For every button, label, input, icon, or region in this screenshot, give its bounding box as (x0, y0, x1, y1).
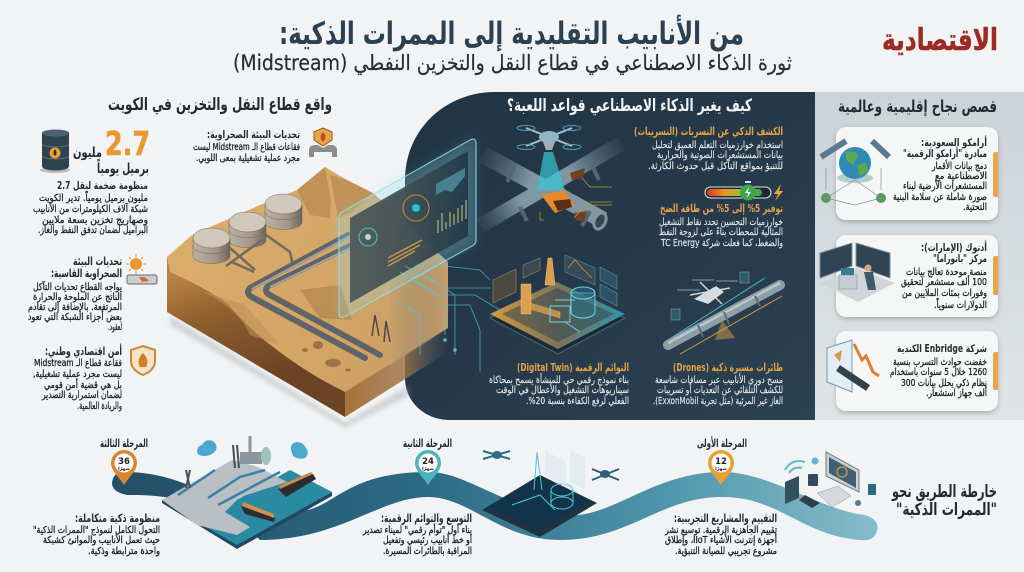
block: 5% pumping energy saving: توفير 5% إلى 5% من طاقة الضخ (660, 202, 783, 215)
scan beam (537, 152, 565, 190)
phase 3: منظومة ذكية متكاملة: (75, 511, 160, 526)
icon: energy meter (705, 181, 783, 201)
block: Kuwait network: البراميل لضمان تدفق النفط والغاز. (38, 225, 148, 236)
card: Enbridge: 1260 خلال 5 سنوات باستخدام (890, 367, 987, 378)
icon: sun and corroded pipe (126, 254, 157, 284)
pin: 12 months (708, 450, 734, 485)
block: harsh desert environment (28, 254, 157, 333)
card: Enbridge: ألف جهاز استشعار. (926, 386, 987, 399)
main pipelines (248, 235, 365, 358)
beam (715, 320, 735, 340)
card: Aramco (821, 127, 998, 220)
block: 5% pumping energy saving: والضغط، كما فعلت شركة TC Energy (660, 238, 783, 249)
card: Enbridge: نظام ذكي يحلل بيانات 300 (901, 378, 987, 389)
block: national economic security: بل هي قضية أمن قومي (44, 378, 122, 391)
block: national economic security: ليست مجرد عملية تشغيلية, (33, 369, 122, 380)
phase 2: المرحلة الثانية (403, 436, 452, 450)
ship lower (241, 502, 275, 522)
pin: 36 months (111, 450, 137, 485)
signs (671, 309, 680, 320)
phase 1 (664, 436, 777, 557)
block: smart leak detection: للتنبؤ بمواقع التآكل قبل حدوث الكارثة. (648, 159, 783, 172)
block: harsh desert environment: بعض أجزاء الشبكة التي تعود (28, 310, 122, 323)
icon: flame shield with pipe (309, 128, 337, 157)
pipelines on land (178, 470, 280, 505)
phase 3: حيث تعمل الأنابيب والموانئ كشبكة (43, 533, 160, 546)
pin: 36 months: 36 (118, 457, 130, 467)
card: ADNOC (820, 235, 998, 317)
block: desert challenges top: فقاعات قطاع الـ Midstream ليست (193, 142, 300, 153)
land (162, 460, 287, 535)
screen frame (339, 139, 476, 317)
refinery (186, 436, 271, 488)
pipe one (482, 154, 603, 220)
block: harsh desert environment: لعقود. (108, 322, 122, 333)
icon: drone right (592, 469, 619, 480)
ship upper (278, 472, 316, 497)
storage tanks (193, 194, 302, 264)
block: smart drones: مسح دوري الأنابيب عبر مسافات شاسعة (655, 373, 783, 386)
screen (350, 151, 468, 303)
illustration: smart port (162, 436, 332, 549)
diorama ground shadow (170, 316, 410, 428)
illustration: drone scanning cracked pipe (480, 126, 622, 233)
phase 3: المرحلة الثالثة (100, 436, 148, 450)
left cliff face (167, 257, 345, 417)
block: smart leak detection: بيانات المستشعرات الصوتية والحرارية (657, 150, 783, 161)
panel: success stories background (810, 92, 1024, 420)
stat: 2.7 million barrels: مليون (73, 145, 102, 161)
phase 1: مشروع تجريبي للصيانة التنبؤية. (675, 546, 777, 557)
icon: falling chart with pipe (827, 340, 880, 400)
corrosion (541, 190, 575, 213)
phase 2: التوسع والتوائم الرقمية: (381, 511, 472, 526)
pipe two lower (480, 188, 545, 226)
block: Kuwait network (33, 180, 148, 236)
card: Enbridge: خفضت حوادث التسرب بنسبة (893, 357, 987, 368)
gauge (359, 228, 377, 246)
wireframe tank (550, 287, 595, 332)
icon: lightning bolt (774, 184, 783, 201)
block: national economic security: فقاعة قطاع الـ Midstream (34, 358, 122, 369)
block: national economic security: لضمان استمرارية التصدير (41, 390, 122, 401)
block: digital twins: بناء نموذج رقمي حي للمنشأة يسمح بمحاكاة (489, 373, 629, 386)
drone (677, 280, 738, 304)
panel heading: how AI changes: كيف يغير الذكاء الاصطناعي قواعد اللعبة؟ (507, 96, 752, 116)
icon: control room (820, 243, 895, 302)
pipeline (668, 285, 780, 345)
rocks (302, 341, 351, 372)
orange refinery (521, 258, 560, 318)
block: Kuwait network: شبكة آلاف الكيلومترات من الأنابيب (33, 202, 148, 215)
card: ADNOC: مركز "بانوراما" (933, 253, 987, 265)
drone flight line (668, 278, 765, 340)
pin: 36 months: شهرًا (118, 467, 130, 472)
pipe flanges (507, 165, 599, 226)
block: harsh desert environment: الناتج عن الملوحة والحرارة (33, 292, 122, 303)
block: harsh desert environment: يواجه القطاع تحديات التآكل (33, 280, 122, 293)
block: smart leak detection (634, 125, 783, 172)
card: Aramco: مبادرة "أرامكو الرقمية" (903, 146, 987, 160)
phase 1: المرحلة الأولى (697, 436, 747, 451)
tab (993, 152, 998, 197)
roadmap title (891, 482, 997, 520)
stat: 2.7 million barrels (73, 124, 150, 177)
block: national economic security: أمن اقتصادي وطني: (45, 343, 122, 359)
title: من الأنابيب التقليدية إلى الممرات الذكية: (279, 14, 744, 52)
block: desert challenges top: مجرد عملية تشغيلية بمعى اللوبي. (196, 153, 300, 164)
block: smart leak detection: استخدام خوارزميات التعلم العميق لتحليل (652, 140, 783, 151)
icon: oil barrel (40, 130, 70, 173)
phase 2: بناء أول "توأم رقمي" لميناء تصدير (362, 523, 472, 536)
card: Aramco: التحتية. (963, 202, 987, 213)
block: smart drones (653, 361, 783, 407)
card: ADNOC: وفورات بمئات الملايين من (902, 288, 987, 299)
block: digital twins (489, 361, 629, 407)
panel: how AI changes the game (405, 92, 815, 420)
block: 5% pumping energy saving: خوارزميات التحسين تحدد نقاط التشغيل (659, 217, 783, 228)
block: harsh desert environment: تحديات البيئة (73, 254, 122, 268)
floating charts (545, 450, 585, 490)
pin: 24 months (415, 450, 441, 485)
card: ADNOC: 100 ألف مستشعر لتحقيق (901, 275, 987, 288)
card: ADNOC: أدنوك (الإمارات): (921, 240, 987, 254)
callout lines (540, 178, 612, 220)
block: 5% pumping energy saving (659, 202, 783, 249)
block: smart leak detection: الكشف الذكي عن التسربات (التسريبات) (634, 125, 783, 138)
card: Enbridge (827, 331, 998, 411)
block: Kuwait network: منظومة ضخمة لنقل 2.7 (57, 180, 148, 192)
card: Aramco: أرامكو السعودية: (921, 135, 987, 149)
circuit traces (396, 265, 500, 372)
card: Aramco: دمج بيانات الأقمار (931, 159, 987, 172)
phase 2: أو خط أنابيب رئيسي وتفعيل (383, 533, 472, 546)
block: digital twins: الفعلي لرفع الكفاءة بنسبة 20%. (526, 396, 629, 407)
pin: 12 months: شهرًا (715, 467, 727, 472)
card: Aramco: المستشعرات الأرضية لبناء (903, 179, 987, 192)
pin: 12 months: 12 (715, 457, 727, 467)
pin: 24 months: شهرًا (422, 467, 434, 472)
tab (993, 256, 998, 295)
wireframe (512, 452, 573, 510)
phase 2 (362, 436, 472, 557)
illustration: digital twin platform (490, 255, 625, 354)
block: smart drones: طائرات مسيرة ذكية (Drones) (673, 361, 783, 374)
block: digital twins: التوائم الرقمية (Digital Twin) (517, 361, 629, 374)
pipe mouth (589, 209, 611, 233)
section heading: Kuwait reality: واقع قطاع النقل والتخزين في الكويت (108, 95, 332, 115)
oil rigs (372, 315, 390, 342)
sand surface (167, 167, 448, 392)
phase 1: تقييم الجاهزية الرقمية. توسيع نشر (664, 525, 777, 536)
illustration: twin platform on ribbon (482, 450, 597, 537)
tab (993, 352, 998, 390)
pipe two (545, 143, 622, 188)
right cliff face (345, 325, 448, 417)
orange flight line (680, 296, 782, 354)
icon: globe with satellites (821, 141, 889, 205)
icon: drone left (483, 451, 510, 459)
card: ADNOC: الدولارات سنوياً. (934, 297, 987, 311)
floating data panels (493, 269, 516, 303)
orange data bars (388, 240, 422, 266)
phase 1: أجهزة إنترنت الأشياء IIoT، وإطلاق (665, 533, 777, 546)
icon: flame shield (131, 346, 155, 375)
block: harsh desert environment: المرتفعة. بالإضافة إلى تقادم (28, 302, 122, 313)
block: national economic security (33, 343, 155, 412)
block: 5% pumping energy saving: المثالية للمحطات بناءً على لزوجة النفط (659, 226, 783, 238)
block: desert challenges top: تحديات البيئة الصحراوية: (207, 129, 300, 141)
bar chart (438, 200, 466, 233)
block: smart drones: الغاز غير المرئية (مثل تجربة ExxonMobil). (653, 396, 783, 407)
drone (517, 126, 581, 150)
feeder pipes (226, 232, 292, 272)
phase 3: واحدة مترابطة وذكية. (88, 546, 160, 557)
card: Aramco: صورة شاملة عن سلامة البنية (893, 192, 987, 203)
illustration: inspection drone and pipeline (668, 272, 782, 354)
subtitle: ثورة الذكاء الاصطناعي في قطاع النقل والتخزين النفطي (Midstream) (233, 51, 792, 75)
water (197, 470, 332, 545)
block: Kuwait network: مليون برميل يومياً. تدير الكويت (39, 190, 148, 204)
block: Kuwait network: وصهاريج تخزين بسعة ملايين (42, 215, 148, 226)
illustration: digital devices (785, 452, 876, 508)
mountain shading (297, 167, 373, 218)
radial gauge right (403, 195, 429, 221)
phase 3 (33, 436, 160, 557)
phase 1: التقييم والمشاريع التجريبية: (674, 511, 777, 526)
block: digital twins: سيناريوهات التشغيل والأعطال في الوقت (496, 383, 629, 396)
block: desert challenges top (193, 128, 337, 164)
block: smart drones: للكشف التلقائي عن التعديات أو تسريبات (657, 383, 783, 396)
stat: 2.7 million barrels: برميل يومياً (97, 158, 149, 177)
block: harsh desert environment: الصحراوية القاسية: (51, 266, 122, 281)
pin: 24 months: 24 (422, 457, 434, 467)
phase 3: التحول الكامل لنموذج "الممرات الذكية" (33, 525, 160, 536)
stat: 2.7 million barrels: 2.7 (105, 124, 150, 163)
port base shadow (162, 492, 332, 549)
illustration: holographic dashboard (338, 138, 476, 317)
phase 2: المراقبة بالطائرات المسيرة. (383, 546, 472, 557)
card: Enbridge: شركة Enbridge الكندية (897, 343, 987, 355)
line chart (436, 168, 465, 195)
illustration: desert diorama (167, 167, 450, 428)
roadmap ribbon (112, 472, 878, 540)
card: Aramco: الاصطناعية مع (935, 171, 987, 182)
cloud icons (197, 440, 308, 459)
hologram glow (338, 138, 475, 317)
platform base (490, 286, 625, 354)
card: ADNOC: منصة موحدة تعالج بيانات (906, 267, 987, 278)
block: national economic security: والريادة العالمية. (77, 401, 122, 412)
